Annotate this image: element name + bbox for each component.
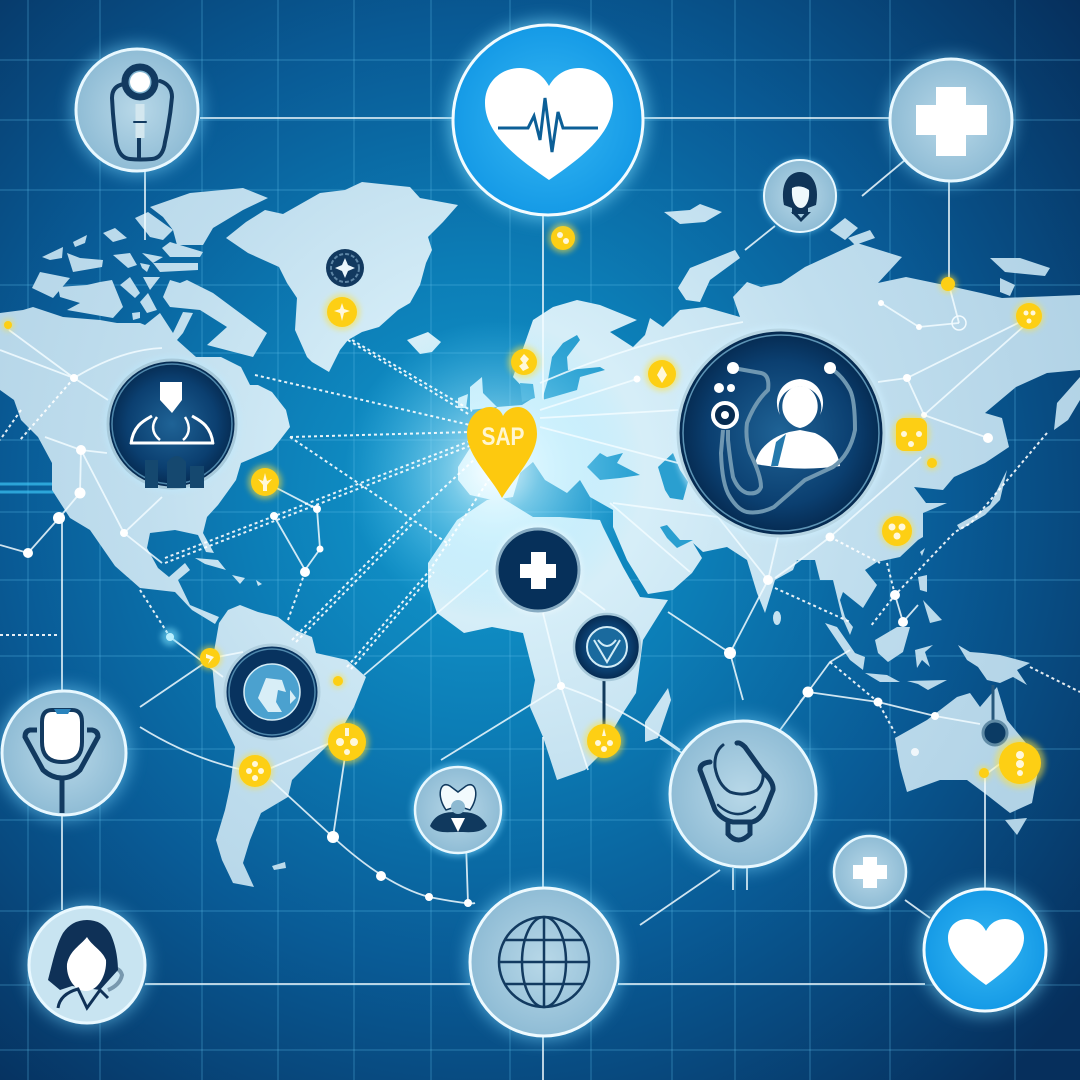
Svalbard xyxy=(664,204,722,224)
icon: stethoscope xyxy=(25,730,98,778)
icon: woman xyxy=(48,920,118,990)
icon: doctor xyxy=(160,382,182,413)
SAP location pin xyxy=(467,407,537,498)
icon: portrait xyxy=(430,812,487,832)
panel: woman avatar node xyxy=(762,158,838,234)
pin body xyxy=(467,407,537,498)
panel: top heart pulse node xyxy=(448,20,648,220)
Eurasia xyxy=(458,243,1080,635)
icon: woman xyxy=(783,172,817,214)
icon: Greenland compass badge xyxy=(326,249,364,287)
badge glow xyxy=(2,223,1045,789)
glow around SAP hub xyxy=(345,320,645,620)
icon: heart xyxy=(485,68,613,180)
Australia dark marker xyxy=(983,685,1007,745)
Iceland xyxy=(407,332,441,354)
icon: stethoscope hint xyxy=(108,968,122,990)
dark connector xyxy=(602,677,606,727)
network nodes xyxy=(23,300,993,907)
panel: Africa cross node xyxy=(494,526,582,614)
icon: chest piece xyxy=(713,403,737,427)
Borneo xyxy=(875,627,910,662)
panel: bottom globe node xyxy=(466,884,622,1040)
icon: pulse line xyxy=(498,98,598,152)
Philippines and Taiwan xyxy=(918,548,942,623)
badge glyphs xyxy=(206,232,1036,781)
Australia xyxy=(895,687,1040,813)
Sumatra xyxy=(825,623,865,670)
Tasmania xyxy=(1005,818,1027,835)
icon: heart xyxy=(948,919,1024,985)
icon: cross xyxy=(520,552,556,589)
icon: cross xyxy=(916,87,987,156)
icon: stethoscope xyxy=(700,743,773,840)
Russian arctic islands xyxy=(830,218,1050,296)
icon: globe xyxy=(244,664,300,720)
Africa xyxy=(428,498,668,780)
Canadian Arctic islands xyxy=(32,188,268,357)
panel: top-left stethoscope node xyxy=(71,44,203,176)
New Guinea xyxy=(958,645,1030,685)
Falkland islands xyxy=(272,862,286,870)
South America xyxy=(212,605,366,887)
inland seas xyxy=(520,335,693,548)
panel: lower-right heart node xyxy=(919,884,1051,1016)
icon: cross xyxy=(853,857,887,888)
badge discs xyxy=(4,226,1042,787)
icon: stethoscope tube xyxy=(721,368,855,512)
panel: top-right cross node xyxy=(887,56,1015,184)
panel: left stethoscope node xyxy=(0,686,131,820)
North America xyxy=(0,307,290,624)
icon: stethoscope xyxy=(112,67,172,160)
world map xyxy=(0,182,1080,887)
Java and lesser islands xyxy=(865,673,947,690)
dashed rays from SAP hub xyxy=(0,340,1080,733)
panel: North America doctor node xyxy=(104,356,240,492)
panel: lower-right stethoscope node xyxy=(666,717,820,871)
Britain and Ireland xyxy=(458,377,497,410)
panel: Asia doctor with stethoscope node xyxy=(673,325,889,541)
icon: wire globe xyxy=(499,917,589,1007)
panel: bottom-left woman node xyxy=(25,903,149,1027)
Caribbean islands xyxy=(195,558,262,586)
Madagascar xyxy=(645,688,671,742)
SAP label: SAP xyxy=(482,423,524,451)
Greenland xyxy=(226,182,458,372)
icon: city silhouette xyxy=(145,456,204,488)
icon: person xyxy=(777,379,823,415)
Novaya Zemlya xyxy=(678,250,740,302)
panel: small cross node xyxy=(831,833,909,911)
Sri Lanka xyxy=(773,611,781,625)
Japan and Kamchatka xyxy=(957,377,1080,530)
panel: Indian Ocean portrait node xyxy=(411,763,505,857)
icon: emblem xyxy=(587,627,627,667)
yellow badges xyxy=(2,223,1045,789)
panel: South America globe node xyxy=(225,645,319,739)
panel: East Africa emblem node xyxy=(574,614,640,680)
Sulawesi xyxy=(915,645,933,668)
